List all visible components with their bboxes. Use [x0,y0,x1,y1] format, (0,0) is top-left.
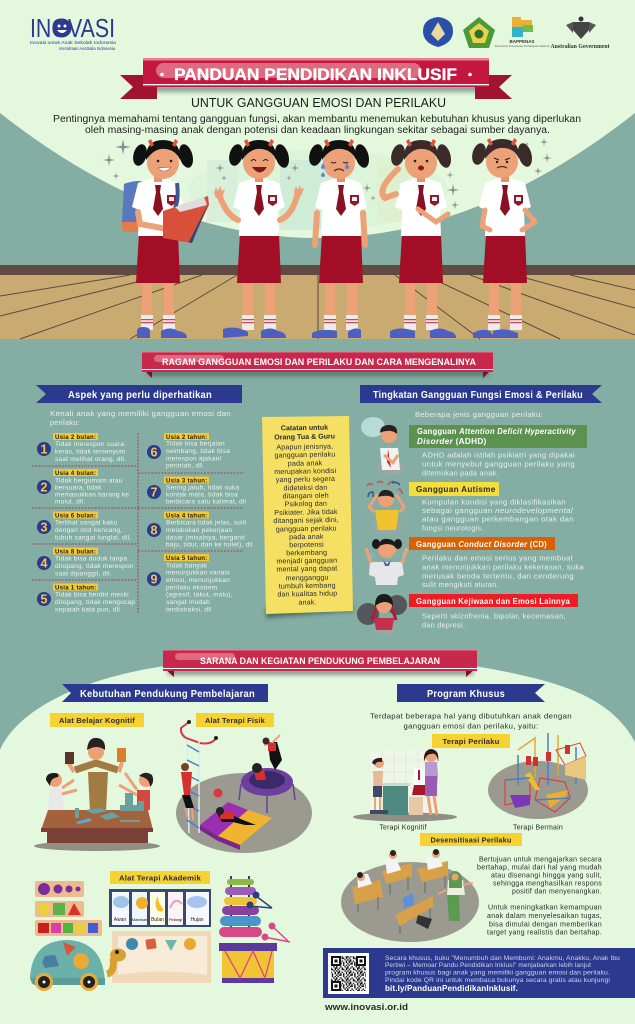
illustration: flash cards: Pelangi [169,917,182,922]
item 2: Tidak bergumam atau [55,478,123,484]
intro text: perilaku: [50,418,80,427]
note card: merupakan kondisi [274,467,337,476]
illustration: classroom [341,849,479,942]
text: desensitisasi part 2: target yang realistis dan bertahap. [487,928,602,936]
illustration: physical therapy gym [176,720,312,853]
label: alat terapi akademik: Alat Terapi Akademik [119,874,202,882]
text: autisme description [422,498,574,532]
item 1: Tidak merespon suara [55,441,124,448]
text: desensitisasi part 1: bertahap, mulai dari hal yang mudah [477,864,602,872]
item 1: saat melihat orang, dll. [55,456,126,463]
callout text: Pertiwi – Memoar Pandu Pendidikan Inklusi" menjabarkan lebih lanjut [385,963,591,969]
callout text: Pindai kode QR ini untuk membaca bukunya secara gratis atau kunjungi [385,978,610,984]
illustration: shape boards [35,881,102,936]
callout text: program khusus bagi anak yang memiliki gangguan emosi dan perilaku. [385,970,610,976]
character: happy girl [214,139,304,338]
item 4: 4 [41,556,48,570]
callout text: bit.ly/PanduanPendidikanInklusif. [385,984,518,993]
text: conduct disorder description [422,554,584,589]
label: terapi perilaku: Terapi Perilaku [442,737,500,746]
item 7: berbicara satu kalimat, dll [166,498,246,506]
text: conduct disorder description: Perilaku dan emosi serius yang membuat [422,554,573,562]
title: PANDUAN PENDIDIKAN INKLUSIF [174,65,457,84]
item 7: Usia 3 tahun: [166,478,208,484]
item 9: emosi, menunjukkan [166,577,230,584]
callout text: Secara khusus, buku "Menumbuh dan Membumi: Anakmu, Anakku, Anak Ibu [385,956,620,962]
item 8: Berbicara tidak jelas, sulit [166,520,246,526]
item 8: dasar (misalnya, berganti [166,534,245,542]
logo: INOVASI: Inovasi untuk Anak Sekolah Indonesia [30,40,116,46]
item 5: Tidak bisa berdiri meski [55,592,129,598]
logo: INOVASI: Kemitraan Australia Indonesia [59,46,116,51]
caption: terapi bermain: Terapi Bermain [513,824,563,832]
item 1: keras, tidak tersenyum [55,448,126,456]
note card: tumbuh kembang [279,581,336,590]
item 3: Usia 6 bulan: [55,514,96,520]
note card: mengganggu [286,574,329,582]
logo: Bappenas [495,17,550,48]
intro: Beberapa jenis gangguan perilaku: [415,410,543,419]
character: confused girl [382,139,456,338]
item 2: memasukkan barang ke [55,492,129,498]
item 9: 9 [151,572,158,586]
character: girl with book [122,139,209,338]
logo: Australian Government [550,16,610,50]
text: desensitisasi part 2: anak dalam menyelesaikan tugas, [487,912,602,920]
header ribbon: aspek: Aspek yang perlu diperhatikan [68,389,212,401]
text: conduct disorder description: anak menunjukkan perilaku kekerasan, suka [422,562,584,572]
intro paragraph: Pentingnya memahami tentang gangguan fungsi, akan membantu menemukan kebutuhan khusus yang diperlukan [53,114,581,125]
item 6: 6 [151,446,158,460]
note card: Apapun jenisnya, [276,443,333,452]
label: desensitisasi [420,833,522,846]
label: alat terapi fisik: Alat Terapi Fisik [205,716,266,725]
section ribbon: ragam gangguan: RAGAM GANGGUAN EMOSI DAN PERILAKU DAN CARA MENGENALINYA [162,357,476,367]
item 4: Usia 8 bulan: [55,550,96,556]
item 1 [37,433,126,463]
panel heading: conduct disorder: Gangguan Conduct Disorder (CD) [416,540,547,549]
item 7 [147,476,246,506]
section ribbon: sarana dan kegiatan [163,649,477,677]
item 3: tubuh sangat lunglai, dll. [55,534,131,542]
panel heading: ADHD: Disorder (ADHD) [417,437,487,446]
text: desensitisasi part 1: sehingga menghasilkan respons [493,880,602,888]
item 8: baju, tidur, dan ke toilet), dll [166,542,253,548]
text: desensitisasi part 1 [477,856,602,896]
header ribbon: aspek [36,385,242,403]
panel heading: conduct disorder [409,537,555,550]
illustration: flash cards: Hujan [190,917,204,923]
panel heading: kejiwaan: Gangguan Kejiwaan dan Emosi Lainnya [416,597,570,606]
title ribbon [120,58,512,99]
icon: ADHD boy [361,417,404,475]
item 8: 8 [151,524,158,538]
text: desensitisasi part 1: atau disenangi hingga yang sulit, [491,872,602,880]
illustration: turtle toy [30,940,126,991]
item 6: Usia 2 tahun: [166,435,208,441]
text: program khusus intro: Terdapat beberapa hal yang dibutuhkan anak dengan [370,712,572,720]
note card: pada anak [289,533,324,541]
label: desensitisasi: Desensitisasi Perilaku [430,836,512,845]
text: desensitisasi part 1: positif dan menyenangkan. [512,888,602,896]
table [41,810,153,830]
item 8: melakukan pekerjaan [166,527,232,534]
note card: mental yang dapat [276,564,337,574]
section ribbon: sarana dan kegiatan: SARANA DAN KEGIATAN PENDUKUNG PEMBELAJARAN [200,656,440,666]
section ribbon: ragam gangguan [142,351,493,378]
item 5: Usia 1 tahun: [55,586,97,592]
note card: berkembang [286,549,327,557]
subtitle: UNTUK GANGGUAN EMOSI DAN PERILAKU [191,96,446,110]
text: desensitisasi part 2: Untuk meningkatkan kemampuan [488,904,602,912]
item 7: kontak mata, tidak bisa [166,492,238,498]
intro text [50,409,231,427]
decorative sparkles [103,138,552,209]
header ribbon: kebutuhan: Kebutuhan Pendukung Pembelajaran [80,688,255,700]
item 3 [37,512,131,542]
text: autisme description: sebagai gangguan neurodevelopmental [422,506,573,515]
item 9 [147,554,233,614]
note card: yang perlu segera [276,475,335,484]
illustration: flash cards: Awan [114,917,126,923]
text: autisme description: atau gangguan perkembangan otak dan [422,514,574,524]
logo: Bappenas: BAPPENAS [509,39,535,44]
text: kejiwaan description: dan depresi. [422,620,465,630]
panel: aspek yang perlu diperhatikan [32,385,253,614]
panel heading: Autisme: Gangguan Autisme [416,485,496,494]
text: conduct disorder description: sulit mengikuti aturan. [422,580,499,589]
item 2: bersuara, tidak [55,484,102,492]
text: program khusus intro: gangguan emosi dan perilaku, yaitu: [404,722,538,730]
item 4: Tidak bisa duduk tanpa [55,556,127,562]
illustration: flash cards [109,889,211,927]
text: ADHD description: untuk menyebut gangguan perilaku yang [422,460,575,468]
logo: INOVASI [30,13,116,51]
note card: menjadi gangguan [276,556,337,566]
text: desensitisasi part 2 [487,904,602,936]
wall skirting [0,265,635,275]
item 6: Tidak bisa berjalan [166,440,225,448]
classroom backdrop [188,150,448,230]
QR code [328,953,369,994]
intro text: Kenali anak yang memiliki gangguan emosi dan [50,409,231,418]
item 8: Usia 4 tahun: [166,514,208,520]
illustration: flash cards: Bulan [151,917,164,923]
item 7: 7 [151,486,158,500]
item 6: perintah, dll. [166,462,205,470]
item 2: 2 [41,480,48,494]
note card: pada anak [288,459,323,468]
panel heading: Autisme [409,482,499,496]
item 4: saat dipanggil, dll. [55,570,112,578]
item 5: ditopang, tidak mengucap [55,599,135,606]
item 4 [37,548,134,578]
item 6 [147,433,230,470]
intro paragraph: oleh masing-masing anak dengan potensi dan keadaan lingkungan sekitar sebagai sumber dayanya. [85,125,550,136]
intro paragraph [53,114,581,136]
text: ADHD description: ditemukan pada anak. [422,468,499,478]
note card: ditangani sejak dini, [273,516,339,525]
boy at table [137,790,150,810]
note card: Orang Tua & Guru [274,432,335,442]
illustration: flash cards: Matahari [132,917,147,922]
text: autisme description: Kumpulan kondisi yang diklasifikasikan [422,498,566,506]
illustration: xylophone and drum [219,876,290,983]
header ribbon: kebutuhan [62,684,268,702]
panel heading: ADHD [409,425,587,448]
note card: dideteksi dan [284,484,327,492]
panel heading: ADHD: Gangguan Attention Deficit Hyperactivity [417,427,576,436]
label: alat terapi akademik [110,871,210,884]
floor [0,275,635,339]
illustration: cognitive therapy bathroom [353,749,457,822]
character: crying girl [307,139,371,338]
item 3: 3 [41,520,48,534]
item 1: Usia 2 bulan: [55,435,96,441]
text: autisme description: fungsi neurologis. [422,524,484,532]
logo: Kemendikbud [423,17,453,47]
text: desensitisasi part 2: bisa dimulai dengan memberikan [489,920,602,928]
item 9: Usia 5 tahun: [166,556,208,562]
text: kejiwaan description: Seperti skizofrenia, bipolar, kecemasan, [422,612,566,620]
item 9: menunjukkan variasi [166,570,230,576]
header ribbon: tingkatan [360,385,602,403]
logo: Australian Government: Australian Government [550,44,610,50]
note card [262,416,353,618]
item 5: 5 [41,592,48,606]
note card: Psikiater. Jika tidak [274,508,338,517]
label: alat belajar kognitif [50,713,144,727]
item 9: (agresif, takut, malu), [166,592,233,598]
item 5: sepatah kata pun, dll [55,606,120,614]
note card: gangguan perilaku [274,450,335,460]
text: ADHD description [422,450,575,478]
item 2: mulut, dll. [55,498,85,506]
header ribbon: program khusus: Program Khusus [427,688,505,700]
item 9: Tidak banyak [166,562,208,570]
item 6: merespon ajakan/ [166,456,222,462]
item 9: perilaku ekstrem [166,584,218,592]
item 2 [37,469,129,506]
illustration: play therapy frames [488,733,588,819]
item 6: seimbang, tidak bisa [166,448,230,455]
icon: autism boy [367,481,404,534]
header ribbon: program khusus [397,684,545,702]
header ribbon: tingkatan: Tingkatan Gangguan Fungsi Emosi & Perilaku [373,389,583,401]
icon: anxious girl [357,594,407,634]
note card: gangguan perilaku [276,524,337,534]
label: alat terapi fisik [196,713,274,727]
item 7: Sering jatuh, tidak suka [166,484,239,492]
panel: tingkatan gangguan [357,385,602,634]
item 5 [37,584,135,614]
girl at table [48,788,64,810]
note card: Catatan untuk [281,424,328,432]
text: desensitisasi part 1: Bertujuan untuk mengajarkan secara [479,856,602,864]
item 9: terdistraksi, dll [166,606,212,614]
item 3: Terlihat sangat kaku [55,520,118,526]
item 3: dengan otot kencang, [55,527,122,534]
note card: anak. [298,598,317,607]
item 4: ditopang, tidak merespon [55,563,134,570]
note card: dan kualitas hidup [277,589,337,599]
logo: Bappenas: Kementerian Perencanaan Pembangunan Nasional [495,45,550,48]
item 2: Usia 4 bulan: [55,471,96,477]
logo: Kemenag [463,17,495,48]
item 9: sangat mudah [166,599,210,606]
callout text [385,956,620,993]
text: program khusus intro [370,712,572,730]
illustration: wall puzzle board [112,931,211,983]
illustration: teacher with puppets [34,738,160,851]
text: kejiwaan description [422,612,566,630]
item 8 [147,512,253,548]
website url: www.inovasi.or.id [324,1002,408,1013]
note card: Psikolog dan [285,500,327,508]
callout: book QR [323,948,635,998]
text: ADHD description: ADHD adalah istilah psikiatri yang dipakai [422,450,575,460]
panel heading: kejiwaan [409,594,578,607]
label: alat belajar kognitif: Alat Belajar Kognitif [59,716,135,725]
logo: INOVASI: INOVASI [30,13,115,43]
item 1: 1 [41,442,48,456]
note card: berpotensi [289,541,324,549]
text: conduct disorder description: merusak benda tertentu, dan cenderung [422,572,574,580]
note card: ditangani oleh [282,492,329,500]
character: angry girl [470,138,535,338]
caption: terapi kognitif: Terapi Kognitif [379,824,427,832]
label: terapi perilaku [432,734,510,748]
icon: crying girl [366,539,407,585]
